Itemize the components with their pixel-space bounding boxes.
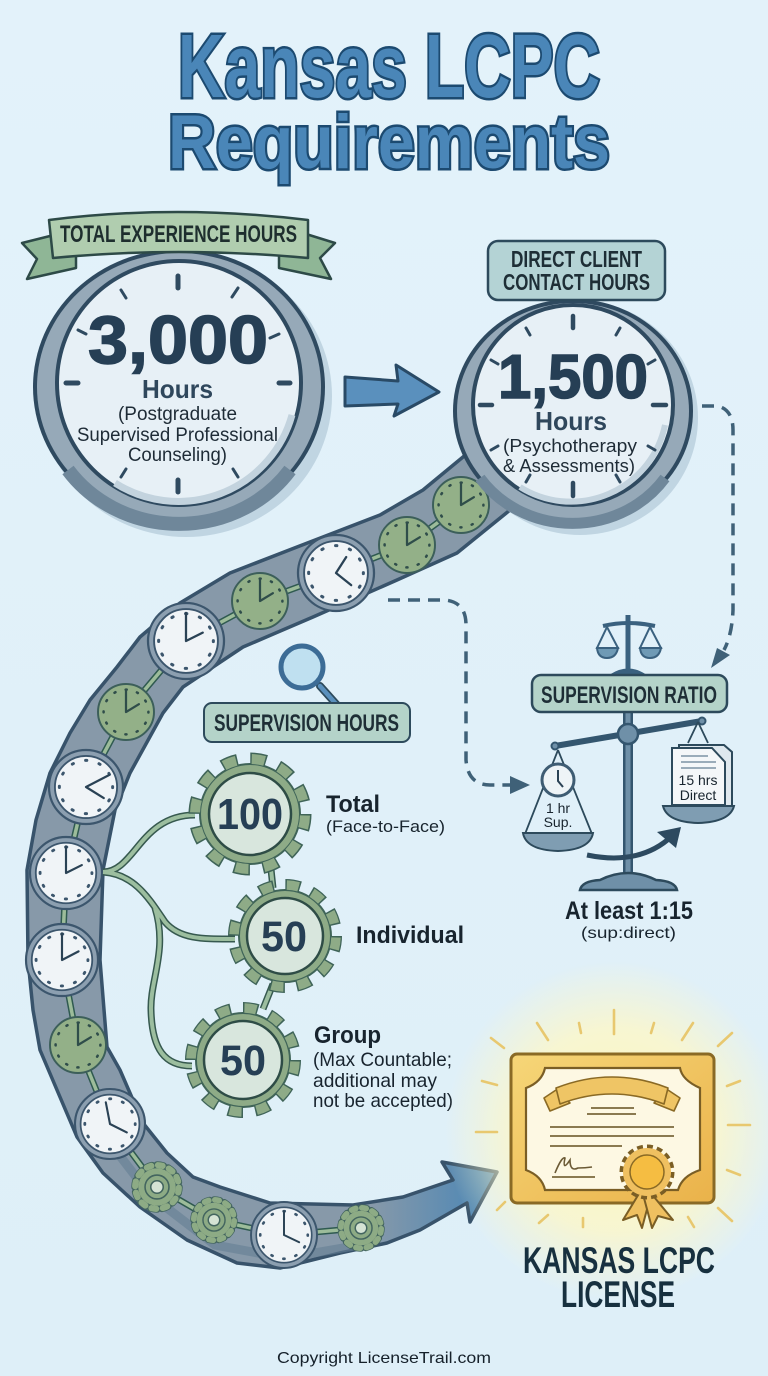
green clock 2 <box>379 517 435 573</box>
ribbon banner: total experience hours: TOTAL EXPERIENCE HOURS <box>60 221 297 248</box>
white clock 1 <box>298 535 374 611</box>
hours label: Hours <box>535 406 607 436</box>
heading box: supervision hours <box>204 703 410 742</box>
label: group <box>313 1022 453 1112</box>
icon: magnifying glass <box>281 646 337 705</box>
certificate ribbon <box>544 1077 680 1111</box>
license certificate <box>511 1054 714 1228</box>
white clock 6 <box>75 1089 145 1159</box>
small gear 2 <box>194 1200 234 1240</box>
label: group: not be accepted) <box>313 1090 453 1112</box>
label: total <box>326 791 445 836</box>
description: (Postgraduate <box>118 404 237 425</box>
direct client contact clock <box>453 299 698 535</box>
seal ribbons <box>623 1192 673 1228</box>
label: group: (Max Countable; <box>313 1049 452 1071</box>
gear: 50 individual: 50 <box>261 913 307 961</box>
ratio caption: At least 1:15 <box>565 897 693 925</box>
supervision ratio scale <box>523 712 734 890</box>
right pan: 15 hrs direct: Direct <box>680 787 716 803</box>
title: Kansas LCPC <box>178 17 600 117</box>
green clock 4 <box>98 684 154 740</box>
dashed connector: path to supervision scale <box>388 600 530 794</box>
gear: 100 total: 100 <box>217 790 283 839</box>
scale pole and beam <box>552 712 706 872</box>
gear: 50 group <box>191 1008 295 1112</box>
license heading <box>523 1240 715 1315</box>
signature <box>555 1158 592 1173</box>
description: & Assessments) <box>503 455 635 476</box>
description <box>77 404 278 466</box>
description: Counseling) <box>128 445 227 466</box>
right pan: 15 hrs direct: 15 hrs <box>679 772 717 788</box>
certificate glow and rays <box>445 960 768 1300</box>
heading box: supervision ratio <box>532 675 727 712</box>
white clock 4 <box>30 837 102 909</box>
1,500 hours figure: 1,500 <box>498 343 648 412</box>
title: Requirements <box>168 100 610 185</box>
gear: 50 group: 50 <box>220 1037 266 1085</box>
white clock 7 <box>251 1202 317 1268</box>
3,000 hours figure: 3,000 <box>88 302 268 378</box>
description: (Psychotherapy <box>503 435 638 456</box>
label: individual: Individual <box>356 922 464 949</box>
small gear 1 <box>135 1165 179 1209</box>
branch connectors from path to gears <box>103 815 273 1066</box>
heading box: supervision hours: SUPERVISION HOURS <box>214 710 399 737</box>
green clock 5 <box>50 1017 106 1073</box>
clocks along the path <box>26 477 489 1268</box>
label: total: Total <box>326 791 380 818</box>
ribbon banner: total experience hours <box>22 212 335 279</box>
gear: 50 individual <box>234 885 336 987</box>
title <box>168 17 610 185</box>
heading box: direct client contact hours <box>488 241 665 300</box>
scale base <box>580 873 677 890</box>
dashed connector: 1,500 clock to supervision ratio <box>702 406 733 668</box>
description <box>503 435 638 476</box>
left pan: 1 hr supervision: Sup. <box>544 814 572 830</box>
label: group: Group <box>314 1022 381 1049</box>
icon: small scales <box>597 615 661 675</box>
total experience clock <box>33 249 332 537</box>
ratio caption: (sup:direct) <box>581 925 676 942</box>
white clock 5 <box>26 924 98 996</box>
arrow between clocks <box>345 365 439 416</box>
label: group: additional may <box>313 1070 437 1092</box>
heading box: direct client contact hours: CONTACT HOURS <box>503 269 650 295</box>
white clock 3 <box>49 750 123 824</box>
footer copyright: Copyright LicenseTrail.com <box>277 1350 491 1367</box>
white clock 2 <box>148 603 224 679</box>
small gear 3 <box>341 1208 381 1248</box>
ratio caption <box>565 897 693 942</box>
green clock 3 <box>232 573 288 629</box>
hours label: Hours <box>142 374 213 404</box>
curved tilt arrow <box>587 827 681 858</box>
certificate text lines <box>550 1108 674 1177</box>
gear: 100 total <box>195 759 305 869</box>
left pan: 1 hr supervision: 1 hr <box>546 800 570 816</box>
green clock 1 <box>433 477 489 533</box>
description: Supervised Professional <box>77 425 278 446</box>
label: total: (Face-to-Face) <box>326 817 445 836</box>
heading box: direct client contact hours: DIRECT CLIENT <box>511 246 642 272</box>
right pan: 15 hrs direct <box>663 722 734 823</box>
left pan: 1 hr supervision <box>523 750 593 851</box>
seal <box>622 1147 672 1197</box>
license heading: LICENSE <box>561 1274 675 1315</box>
progress path arrow <box>27 450 510 1268</box>
